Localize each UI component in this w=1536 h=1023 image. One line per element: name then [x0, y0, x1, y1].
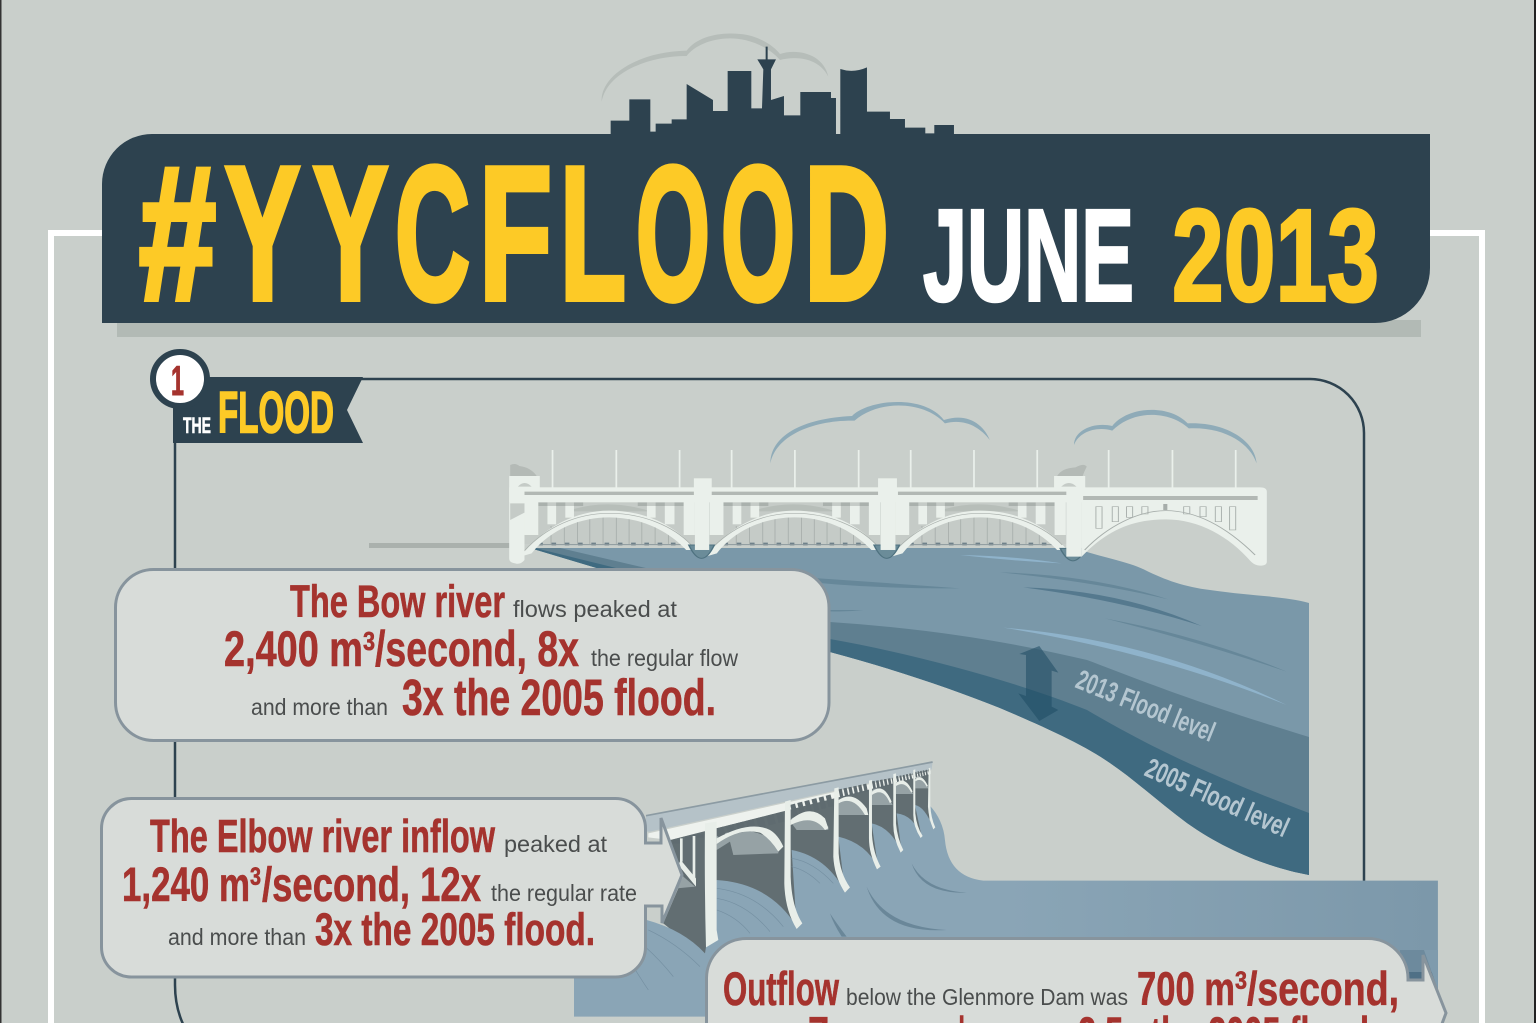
dam arches and piers	[678, 768, 935, 947]
title: #YYCFLOOD: O	[636, 128, 710, 340]
label: 2005 flood level: 2005 Flood level	[1141, 752, 1294, 843]
title: #YYCFLOOD: L	[560, 128, 626, 340]
road approaching bridge	[369, 543, 514, 548]
spillway water	[574, 805, 1438, 1017]
Elbow river callout: peaked at	[504, 831, 608, 857]
Bow river callout: flows peaked at	[513, 596, 678, 622]
Elbow river callout: the regular rate	[491, 880, 637, 906]
Elbow river callout: 3x the 2005 flood.	[315, 904, 595, 955]
water highlights	[783, 555, 1287, 705]
title: #YYCFLOOD: Y	[313, 128, 388, 340]
right plain arch	[1082, 487, 1267, 566]
callout box with pointer	[706, 938, 1446, 1023]
title banner	[102, 128, 1430, 340]
Elbow river callout: 3	[250, 863, 261, 891]
Bow river callout: the regular flow	[591, 645, 738, 671]
banner shadow	[117, 320, 1421, 337]
section heading: the flood	[153, 352, 363, 446]
lion statues	[510, 464, 537, 476]
Outflow callout: 3	[1235, 967, 1247, 995]
line 3: and more than	[168, 924, 306, 950]
line 3: and more than	[251, 694, 388, 720]
deck white stripe	[648, 771, 931, 840]
Bow river callout: 3	[363, 626, 375, 656]
callout box with pointer	[102, 798, 682, 977]
Elbow river callout: /second, 12x	[262, 859, 481, 912]
Bow river callout: /second, 8x	[375, 621, 579, 677]
deck top surface	[646, 762, 933, 832]
arch openings	[677, 777, 929, 888]
Outflow callout	[706, 938, 1446, 1023]
FLOOD: FLOOD	[218, 380, 334, 446]
2013 flood water	[530, 548, 1309, 875]
title: #YYCFLOOD: #	[139, 128, 216, 340]
deck	[509, 487, 1086, 502]
title: #YYCFLOOD: F	[479, 128, 552, 340]
title: #YYCFLOOD: D	[804, 128, 889, 340]
label: 2013 flood level: 2013 Flood level	[1072, 664, 1220, 748]
title: #YYCFLOOD: C	[395, 128, 470, 340]
section frame	[175, 379, 1364, 1023]
skyline silhouette	[611, 47, 954, 137]
skyline cloud	[602, 33, 828, 102]
number 1: 1	[171, 357, 184, 404]
callout box	[116, 570, 829, 740]
deck stripes	[510, 492, 1258, 500]
2005 flood water	[530, 548, 1309, 875]
Outflow callout: below the Glenmore Dam was	[846, 984, 1128, 1010]
dam wall backdrop	[663, 770, 929, 957]
line 1: The Bow river	[290, 576, 505, 627]
Bow river callout	[116, 570, 829, 740]
title: JUNE: JUNE	[923, 182, 1134, 328]
Glenmore dam illustration	[574, 762, 1438, 1017]
lamp posts	[553, 450, 1236, 488]
line 2: 1,240 m	[122, 859, 250, 912]
title: 2013: 2013	[1172, 182, 1379, 328]
clouds above bridge	[770, 402, 1257, 463]
white outer frame	[51, 233, 1482, 1023]
title: #YYCFLOOD: Y	[225, 128, 300, 340]
Bow river callout: 3x the 2005 flood.	[402, 669, 716, 726]
water curves	[633, 858, 833, 990]
line 2: 2,400 m	[224, 621, 363, 677]
THE: THE	[183, 413, 211, 438]
Outflow callout: /second,	[1247, 962, 1399, 1015]
middle water band	[530, 548, 1309, 875]
arches	[520, 502, 696, 557]
title: #YYCFLOOD: O	[721, 128, 795, 340]
spandrel railings	[673, 772, 929, 842]
ribbon	[173, 377, 363, 443]
pier footings in water	[689, 545, 1086, 561]
banner shape	[102, 134, 1430, 323]
number badge	[153, 352, 207, 406]
level difference arrow	[1018, 646, 1058, 721]
Outflow callout: 700 m	[1137, 962, 1235, 1015]
Elbow river callout	[102, 798, 682, 977]
piers and towers	[509, 476, 1085, 564]
river behind outflow pointer	[1400, 950, 1438, 1000]
Bow river with flood levels	[530, 548, 1309, 875]
line 1: The Elbow river inflow	[150, 810, 495, 862]
line 1: Outflow	[723, 962, 839, 1015]
Centre Street bridge illustration	[509, 450, 1267, 566]
